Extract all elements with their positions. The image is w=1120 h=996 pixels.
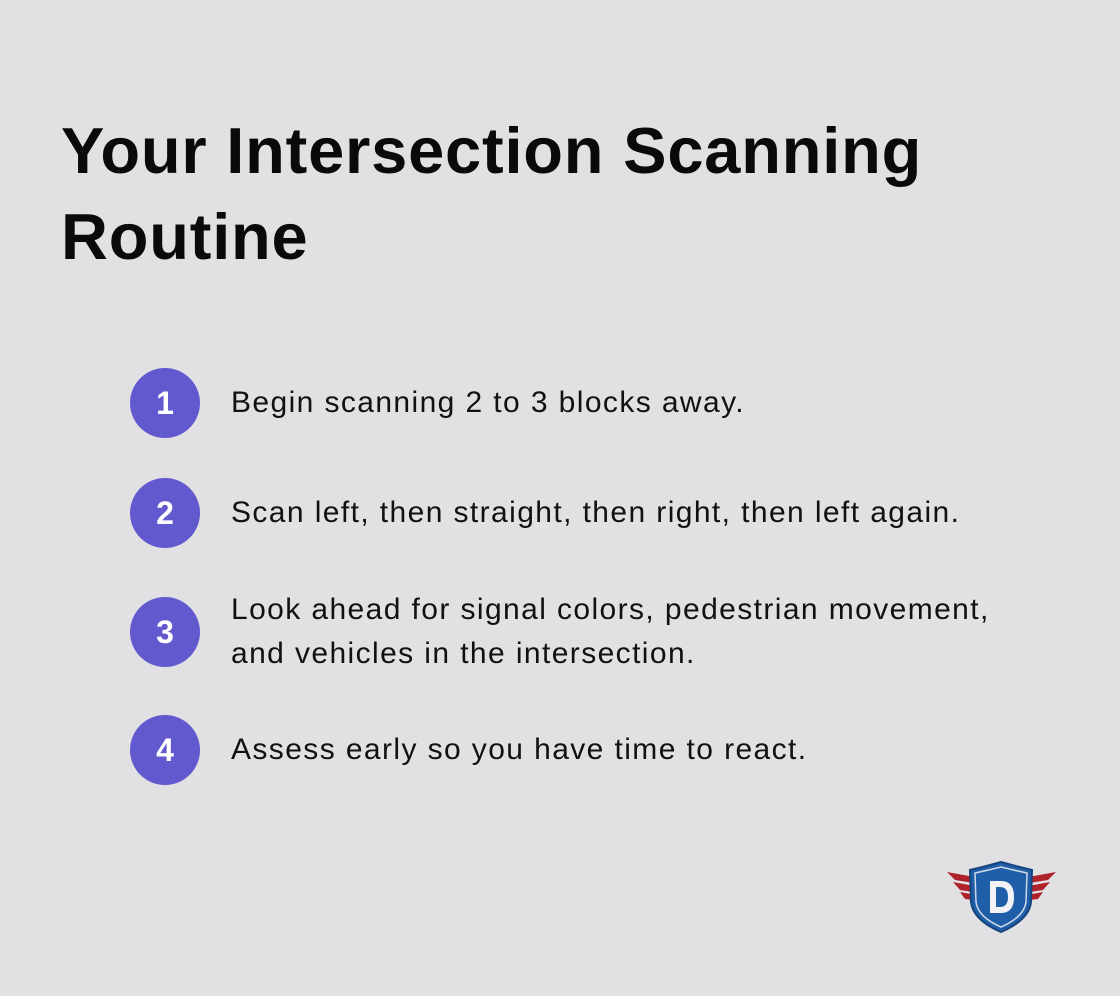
text 3: Look ahead for signal colors, pedestrian movement, xyxy=(231,593,990,626)
logo xyxy=(947,861,1056,934)
step 2 xyxy=(130,478,960,548)
step 4 xyxy=(130,715,808,785)
text 2: Scan left, then straight, then right, then left again. xyxy=(231,496,960,529)
text 1: Begin scanning 2 to 3 blocks away. xyxy=(231,386,745,419)
badge 1 xyxy=(130,368,200,438)
text 4: Assess early so you have time to react. xyxy=(231,733,808,766)
badge 2: 2 xyxy=(156,495,174,531)
title: Your Intersection Scanning xyxy=(61,114,922,187)
badge 2 xyxy=(130,478,200,548)
badge 4: 4 xyxy=(156,732,174,768)
title: Routine xyxy=(61,200,309,273)
step 3 xyxy=(130,593,990,670)
title xyxy=(61,114,922,273)
badge 3: 3 xyxy=(156,614,174,650)
step 1 xyxy=(130,368,745,438)
text 3 xyxy=(231,593,990,670)
badge 3 xyxy=(130,597,200,667)
badge 1: 1 xyxy=(156,385,174,421)
badge 4 xyxy=(130,715,200,785)
text 3: and vehicles in the intersection. xyxy=(231,637,696,670)
